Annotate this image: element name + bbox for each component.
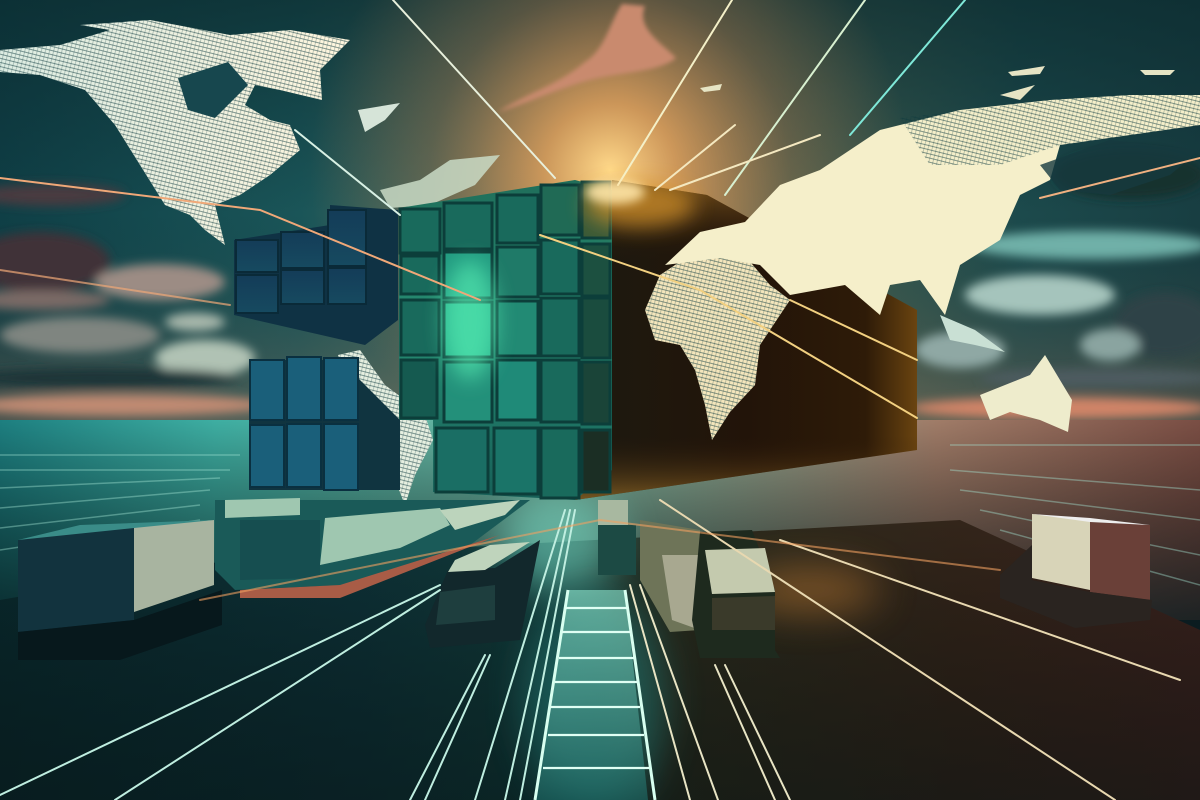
map: North America — [0, 20, 400, 245]
container corner amber highlight — [585, 183, 695, 227]
central light glow — [585, 180, 645, 204]
green face — [399, 180, 612, 500]
road arrows and light trails — [0, 500, 1180, 800]
clouds: right bank — [910, 151, 1200, 419]
truck: centre left — [425, 540, 540, 648]
map: Africa — [645, 250, 790, 440]
cargo ship — [215, 498, 530, 598]
container grid — [400, 182, 610, 498]
clouds: upper pink cloud — [498, 4, 676, 112]
upper blue container stack — [234, 205, 398, 345]
shipping containers block — [399, 180, 917, 500]
map: Eurasia — [665, 95, 1200, 352]
road surface — [0, 520, 1200, 800]
sky light beams — [0, 0, 1200, 418]
railway track — [535, 590, 655, 800]
road light glows — [500, 490, 880, 800]
truck: right container — [1000, 514, 1152, 628]
green glow — [444, 260, 496, 380]
sea — [0, 420, 1200, 620]
lower blue container stack — [249, 357, 400, 490]
dark side face — [575, 180, 917, 500]
map: small islands — [700, 66, 1175, 100]
clouds: left bank — [0, 184, 270, 416]
sky background — [0, 0, 1200, 425]
map: Greenland fragment — [380, 155, 500, 208]
map: Central and South America — [338, 350, 433, 505]
truck: centre right — [640, 520, 780, 658]
truck: left container — [18, 520, 222, 660]
truck: centre small — [598, 500, 636, 575]
map: Australia — [980, 355, 1072, 432]
